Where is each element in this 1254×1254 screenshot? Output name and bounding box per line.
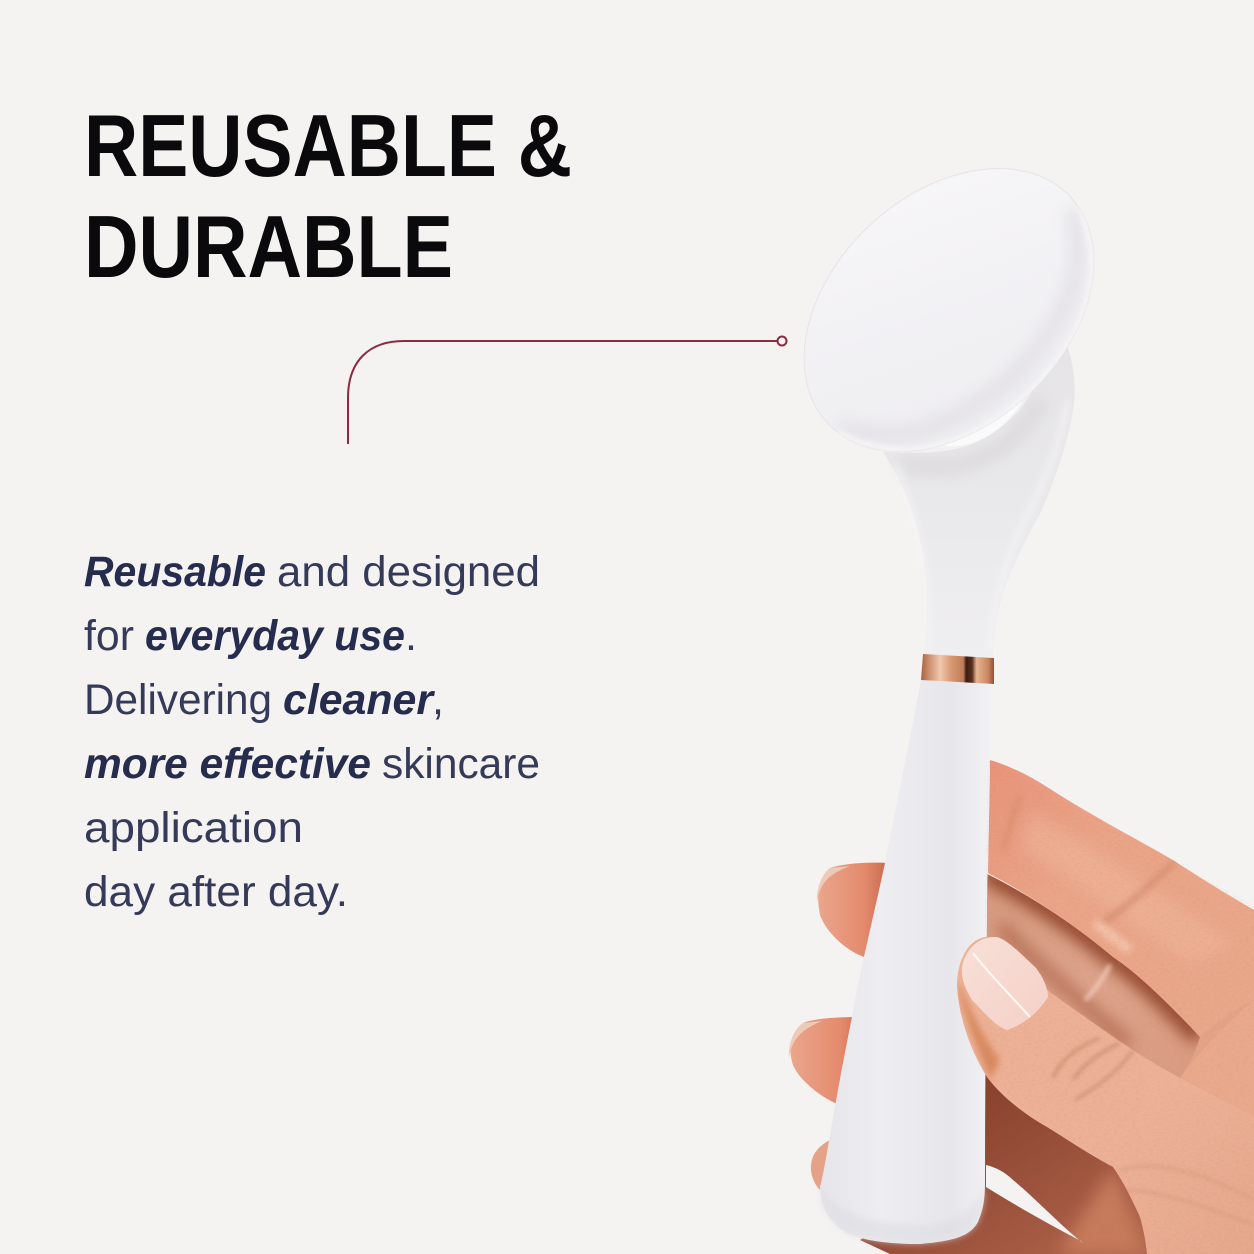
body text: and designed	[277, 548, 540, 596]
body text: ,	[432, 676, 444, 724]
title	[84, 96, 572, 296]
title: REUSABLE &	[84, 96, 572, 195]
hand: middle finger behind	[985, 872, 1200, 1085]
body text: Delivering	[84, 676, 272, 724]
brush: round head	[804, 168, 1094, 452]
body text: skincare	[382, 740, 540, 788]
brush: gap highlight under head	[945, 385, 1028, 446]
brush: handle	[820, 680, 993, 1244]
body text: for	[84, 612, 134, 660]
title: DURABLE	[84, 197, 453, 296]
hand: index finger	[988, 760, 1254, 1037]
hand: palm behind handle	[860, 990, 1254, 1254]
body text: day after day.	[84, 868, 348, 916]
body text: everyday use	[145, 612, 405, 660]
body text: .	[405, 612, 417, 660]
body text	[84, 548, 540, 916]
hand: thumb nail	[962, 937, 1048, 1030]
hand: skin texture overlay	[986, 761, 1253, 1126]
callout line with end dot	[348, 336, 786, 444]
hand: right palm knuckle	[1175, 1000, 1254, 1118]
body text: Reusable	[84, 548, 266, 596]
hand: thumb	[957, 937, 1254, 1254]
body text: application	[84, 804, 303, 852]
brush: rose gold ring	[921, 654, 994, 684]
hand: left fingertips	[789, 863, 900, 1190]
illustration: hand holding brush	[788, 168, 1254, 1254]
body text: more effective	[84, 740, 371, 788]
body text: cleaner	[283, 676, 435, 724]
brush: neck	[883, 345, 1075, 656]
